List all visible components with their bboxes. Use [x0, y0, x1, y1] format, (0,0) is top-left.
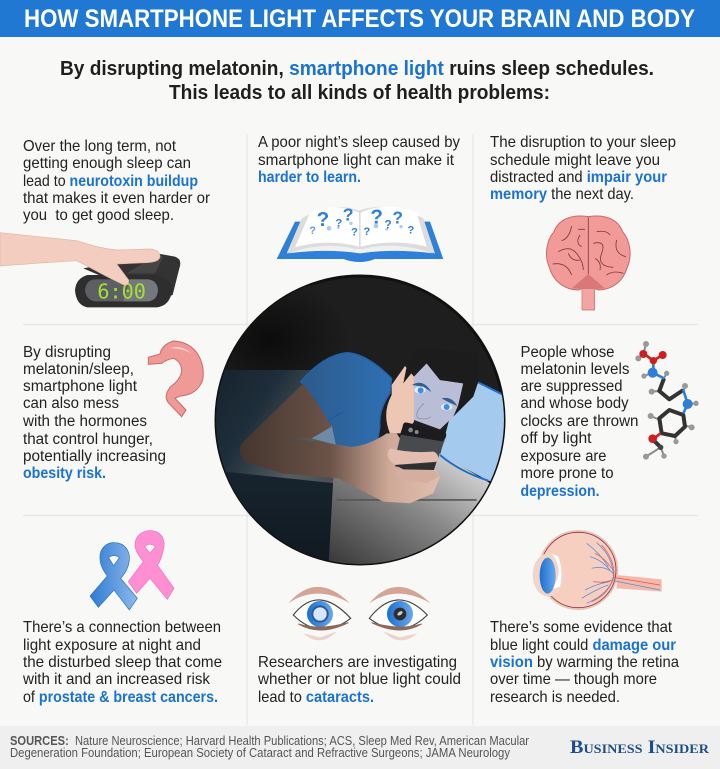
- neck and face: [386, 366, 414, 433]
- icon: open book with question marks: ?: [309, 225, 316, 237]
- text: obesity risk: can also mess: [23, 395, 119, 412]
- text: cataracts: [257, 654, 461, 706]
- phone: [394, 422, 446, 469]
- icon: open book with question marks: ?: [407, 225, 414, 237]
- subtitle: This leads to all kinds of health problems:: [169, 81, 550, 104]
- text: obesity risk: melatonin/sleep,: [23, 361, 134, 378]
- text: prostate and breast cancers: [22, 619, 222, 706]
- text: impair memory: distracted and impair your: [490, 169, 667, 186]
- bed sheet: [328, 453, 490, 564]
- icon: open book with question marks: ?: [351, 227, 358, 239]
- text: damage vision: vision by warming the retina: [490, 654, 679, 671]
- icon: alarm clock with hand: [0, 233, 180, 307]
- text: harder to learn: harder to learn.: [258, 169, 361, 186]
- text: neurotoxin buildup: you to get good sleep.: [23, 207, 174, 224]
- icon: open book with question marks: ?: [335, 218, 342, 230]
- text: obesity risk: that control hunger,: [23, 431, 153, 448]
- logo: Business Insider: [570, 738, 710, 758]
- text: depression: are suppressed: [520, 378, 622, 395]
- text: cataracts: lead to cataracts.: [258, 689, 374, 706]
- text: damage vision: over time — though more: [490, 671, 657, 688]
- text: cataracts: whether or not blue light could: [257, 671, 461, 688]
- text: impair memory: memory the next day.: [490, 186, 634, 203]
- footer: [0, 726, 720, 769]
- text: neurotoxin buildup: getting enough sleep can: [23, 155, 191, 172]
- text: prostate and breast cancers: light exposure at night and: [23, 637, 201, 654]
- icon: melatonin molecule: [635, 341, 699, 460]
- sources: Degeneration Foundation; European Society of Cataract and Refractive Surgeons; JAMA Neurology: [10, 746, 511, 760]
- icon: awareness ribbons: [90, 531, 174, 610]
- text: neurotoxin buildup: [23, 138, 211, 224]
- icon: open book with question marks: [277, 205, 443, 262]
- text: cataracts: Researchers are investigating: [258, 654, 457, 671]
- text: prostate and breast cancers: There’s a connection between: [23, 619, 221, 636]
- hair: [403, 363, 478, 416]
- pillow: [440, 383, 504, 482]
- text: damage vision: research is needed.: [490, 689, 620, 706]
- text: harder to learn: smartphone light can make it: [258, 152, 455, 169]
- text: depression: more prone to: [520, 465, 614, 482]
- text: obesity risk: smartphone light: [23, 378, 138, 395]
- sources: [10, 734, 529, 760]
- arm: [240, 383, 440, 503]
- text: damage vision: blue light could damage our: [490, 637, 676, 654]
- text: impair memory: [490, 134, 676, 203]
- text: depression: exposure are: [520, 448, 606, 465]
- fingers: [388, 448, 438, 465]
- text: prostate and breast cancers: of prostate & breast cancers.: [23, 689, 218, 706]
- text: neurotoxin buildup: that makes it even harder or: [23, 190, 211, 207]
- text: obesity risk: obesity risk.: [23, 465, 106, 482]
- icon: open book with question marks: ?: [392, 207, 403, 227]
- icon: open book with question marks: ?: [317, 208, 329, 231]
- icon: alarm clock with hand: 6:00: [97, 280, 146, 304]
- icon: open book with question marks: ?: [384, 217, 392, 231]
- illustration: person using phone in bed: [214, 274, 506, 566]
- text: depression: [520, 344, 638, 500]
- icon: stomach: [148, 341, 203, 417]
- text: depression: People whose: [520, 344, 614, 361]
- shirt: [301, 353, 392, 447]
- eyes: [412, 383, 431, 392]
- text: prostate and breast cancers: with it and an increased risk: [22, 671, 211, 688]
- icon: open book with question marks: ?: [343, 205, 354, 225]
- text: damage vision: There’s some evidence that: [490, 619, 673, 636]
- icon: eye cross-section: [533, 530, 662, 610]
- subtitle: By disrupting melatonin, smartphone light ruins sleep schedules.: [60, 57, 654, 80]
- text: depression: and whose body: [520, 395, 629, 412]
- text: depression: clocks are thrown: [520, 413, 638, 430]
- text: harder to learn: A poor night’s sleep caused by: [258, 134, 460, 151]
- text: depression: depression.: [520, 483, 600, 500]
- icon: brain: [546, 216, 630, 310]
- subtitle: [60, 57, 654, 104]
- text: neurotoxin buildup: lead to neurotoxin buildup: [23, 173, 198, 190]
- text: prostate and breast cancers: the disturbed sleep that come: [23, 654, 222, 671]
- text: obesity risk: potentially increasing: [23, 448, 166, 465]
- icon: cataract eyes: [288, 587, 431, 640]
- text: obesity risk: [22, 344, 166, 482]
- text: neurotoxin buildup: Over the long term, not: [23, 138, 177, 155]
- text: impair memory: schedule might leave you: [490, 152, 660, 169]
- text: impair memory: The disruption to your sleep: [490, 134, 676, 151]
- sources: SOURCES: Nature Neuroscience; Harvard Health Publications; ACS, Sleep Med Rev, American Macular: [10, 734, 529, 748]
- text: depression: melatonin levels: [520, 361, 630, 378]
- text: harder to learn: [258, 134, 460, 186]
- text: obesity risk: By disrupting: [23, 344, 111, 361]
- icon: open book with question marks: ?: [370, 205, 383, 228]
- text: depression: off by light: [520, 430, 592, 447]
- text: obesity risk: with the hormones: [22, 413, 147, 430]
- text: damage vision: [490, 619, 679, 706]
- icon: open book with question marks: ?: [363, 226, 370, 238]
